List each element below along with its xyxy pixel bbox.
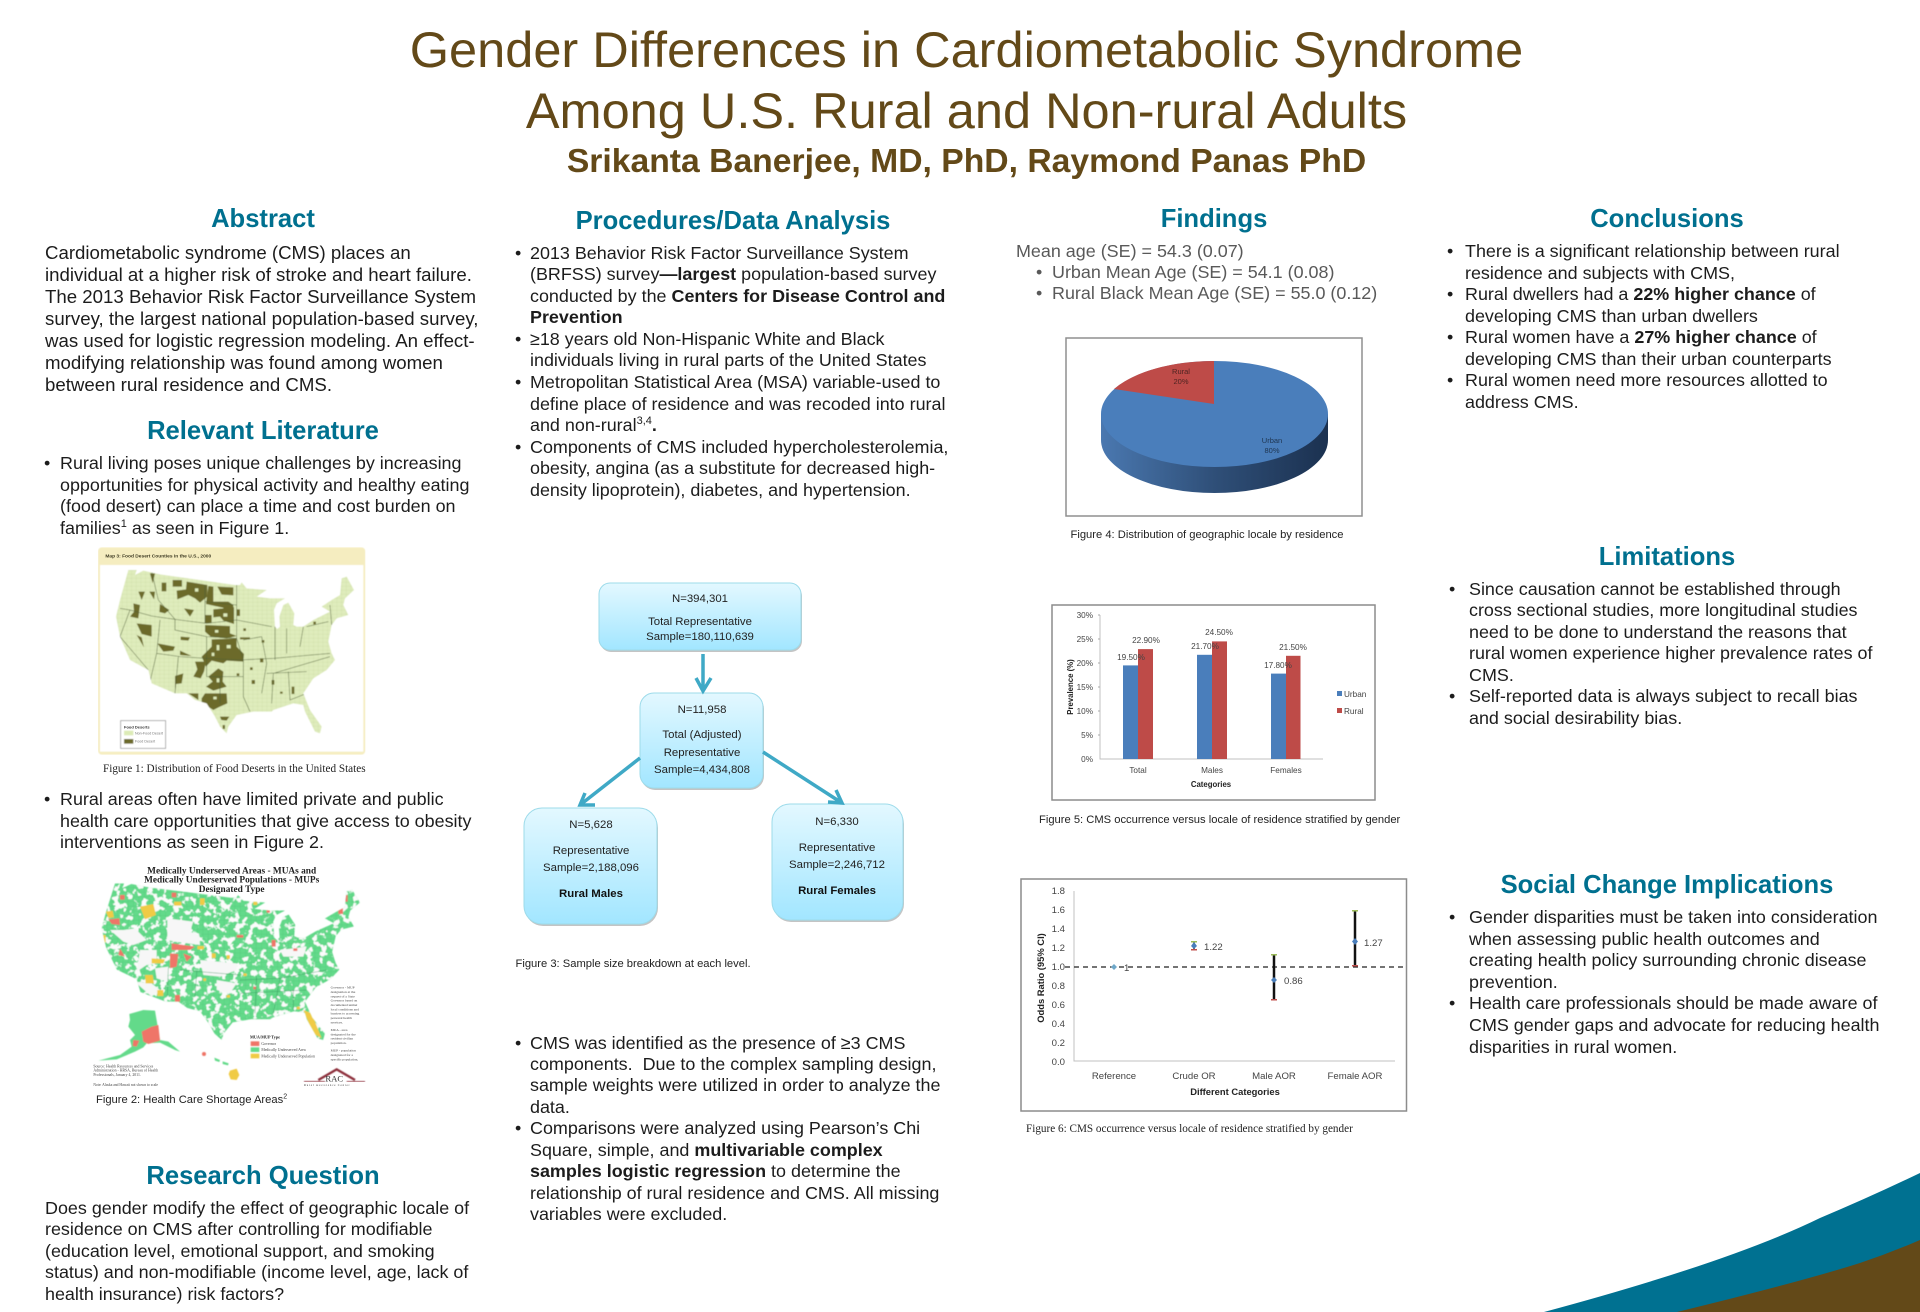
panel: limitations bbox=[1450, 543, 1872, 728]
figure 2: medically underserved map: population. bbox=[331, 1041, 347, 1045]
figure 2: medically underserved map: Administration - HRSA, Bureau of Health bbox=[93, 1069, 158, 1074]
text: limitations bullets: Self-reported data is always subject to recall bias bbox=[1469, 686, 1858, 706]
text: literature bullet 1: Rural living poses unique challenges by increasing bbox=[60, 453, 462, 473]
bars: females: 17.80% bbox=[1264, 661, 1292, 670]
box: rural females: N=6,330 bbox=[815, 816, 859, 828]
text: research question body: status) and non-modifiable (income level, age, lack of bbox=[45, 1262, 468, 1282]
text: research question body bbox=[45, 1198, 470, 1304]
text: procedures bullets continued: Comparisons were analyzed using Pearson’s Chi bbox=[530, 1118, 920, 1138]
panel: research question bbox=[45, 1162, 470, 1304]
figure 1: food desert map bbox=[98, 547, 366, 755]
arrow: adjusted to females bbox=[763, 752, 842, 803]
figure 2: medically underserved map: Governor bbox=[261, 1042, 277, 1046]
heading: limitations: Limitations bbox=[1599, 543, 1735, 571]
text: abstract body: was used for logistic regression modeling. An effect- bbox=[45, 330, 475, 351]
text: procedures bullets: density lipoprotein), diabetes, and hypertension. bbox=[530, 480, 911, 500]
text: conclusions bullets: Rural women have a 27% higher chance of bbox=[1465, 327, 1817, 347]
text: procedures bullets: and non-rural3,4. bbox=[530, 415, 657, 435]
text: procedures bullets: individuals living in rural parts of the United States bbox=[530, 350, 926, 370]
figure 2: medically underserved map: MUA/MUP Type bbox=[250, 1035, 280, 1040]
heading: findings: Findings bbox=[1161, 205, 1267, 233]
text: social change bullets: when assessing public health outcomes and bbox=[1469, 929, 1820, 949]
text: conclusions bullets: address CMS. bbox=[1465, 392, 1579, 412]
point: male AOR bbox=[1271, 954, 1303, 1000]
heading: social change implications: Social Change Implications bbox=[1501, 871, 1833, 899]
figure 2: medically underserved map: request of a State bbox=[331, 994, 355, 998]
figure 6: odds ratio chart bbox=[1020, 878, 1408, 1112]
figure 5: prevalence bar chart: 20% bbox=[1077, 659, 1093, 668]
text: procedures bullets continued bbox=[516, 1032, 940, 1224]
figure 6: odds ratio chart: Odds Ratio (95% CI) bbox=[1035, 933, 1046, 1023]
text: limitations bullets: Since causation cannot be established through bbox=[1469, 579, 1841, 599]
bars: males: 21.70% bbox=[1191, 642, 1219, 651]
text: procedures bullets: obesity, angina (as a substitute for decreased high- bbox=[530, 458, 935, 478]
text: procedures bullets continued: sample weights were utilized in order to analyze the bbox=[530, 1075, 940, 1095]
figure 2: medically underserved map: specific population. bbox=[331, 1057, 358, 1061]
figure 5: prevalence bar chart: 15% bbox=[1077, 683, 1093, 692]
bars: total bbox=[1117, 636, 1160, 759]
bars: females: 21.50% bbox=[1279, 643, 1307, 652]
text: limitations bullets: rural women experience higher prevalence rates of bbox=[1469, 643, 1872, 663]
figure 6: odds ratio chart: 1.6 bbox=[1052, 905, 1065, 916]
figure 1: food desert map: Non-Food Desert bbox=[135, 732, 163, 736]
figure 2: medically underserved map: Note: Alaska and Hawaii not shown to scale bbox=[93, 1083, 158, 1087]
figure 6: odds ratio chart: 1.8 bbox=[1052, 886, 1065, 897]
text: procedures bullets: ≥18 years old Non-Hispanic White and Black bbox=[530, 329, 884, 349]
box: rural males bbox=[524, 808, 658, 926]
panel: abstract bbox=[45, 205, 478, 395]
bars: total: 22.90% bbox=[1132, 636, 1160, 645]
text: abstract body: The 2013 Behavior Risk Factor Surveillance System bbox=[45, 286, 476, 307]
text: literature bullet 1: families1 as seen in Figure 1. bbox=[60, 518, 289, 538]
figure 6: odds ratio chart: 0.2 bbox=[1052, 1038, 1065, 1049]
text: conclusions bullets: residence and subjects with CMS, bbox=[1465, 262, 1735, 282]
figure 4: pie chart of locale: 20% bbox=[1173, 377, 1189, 386]
text: procedures bullets: define place of residence and was recoded into rural bbox=[530, 394, 945, 414]
figure 6: odds ratio chart: Different Categories bbox=[1190, 1086, 1280, 1097]
legend: Urban bbox=[1344, 690, 1367, 699]
figure 2: medically underserved map: barriers to accessing bbox=[331, 1012, 359, 1016]
figure 5: prevalence bar chart: 5% bbox=[1081, 731, 1093, 740]
box: rural males: Representative bbox=[553, 845, 629, 857]
text: abstract body: individual at a higher risk of stroke and heart failure. bbox=[45, 264, 472, 285]
figure 6: odds ratio chart: 1.2 bbox=[1052, 943, 1065, 954]
text: procedures bullets: (BRFSS) survey—largest population-based survey bbox=[530, 264, 936, 284]
box: rural females: Representative bbox=[799, 842, 875, 854]
text: abstract body bbox=[45, 242, 478, 395]
figure 2: medically underserved map: documented unmet bbox=[331, 1003, 357, 1007]
text: research question body: health insurance) risk factors? bbox=[45, 1284, 284, 1304]
text: procedures bullets bbox=[516, 242, 948, 500]
box: adjusted total: Total (Adjusted) bbox=[662, 729, 742, 741]
point: reference bbox=[1111, 963, 1129, 974]
text: limitations bullets: cross sectional studies, more longitudinal studies bbox=[1469, 600, 1858, 620]
figure 1: food desert map: Food Deserts bbox=[124, 724, 150, 729]
figure 5: prevalence bar chart: Prevalence (%) bbox=[1066, 659, 1075, 715]
figure 5: prevalence bar chart: 0% bbox=[1081, 755, 1093, 764]
figure 5: prevalence bar chart: 10% bbox=[1077, 707, 1093, 716]
figure 1: food desert map: Map 3: Food Desert Counties in the U.S., 2000 bbox=[105, 554, 211, 560]
figure 2: medically underserved map: Governor based on bbox=[331, 999, 358, 1003]
text: abstract body: modifying relationship was found among women bbox=[45, 352, 443, 373]
title bbox=[410, 21, 1523, 180]
figure 4: pie chart of locale: Rural bbox=[1172, 367, 1190, 376]
box: total sample: Sample=180,110,639 bbox=[646, 631, 754, 643]
figure 2: medically underserved map: MUP - population bbox=[331, 1049, 356, 1053]
text: abstract body: between rural residence and CMS. bbox=[45, 374, 332, 395]
figure 6: odds ratio chart: 1.0 bbox=[1052, 962, 1065, 973]
text: literature bullet 2: interventions as seen in Figure 2. bbox=[60, 832, 324, 852]
figure 2: medically underserved map: Rural Assistance Center bbox=[304, 1083, 350, 1087]
figure 5: prevalence bar chart: 30% bbox=[1077, 611, 1093, 620]
box: rural females: Rural Females bbox=[798, 885, 876, 897]
box: adjusted total: Sample=4,434,808 bbox=[654, 764, 750, 776]
text: procedures bullets continued: CMS was identified as the presence of ≥3 CMS bbox=[530, 1032, 905, 1052]
panel: social change implications bbox=[1450, 871, 1879, 1057]
text: conclusions bullets: developing CMS than their urban counterparts bbox=[1465, 348, 1832, 368]
figure 4: pie chart of locale: Urban bbox=[1262, 436, 1282, 445]
figure 2: medically underserved map: designated for a bbox=[331, 1053, 353, 1057]
text: procedures bullets: Prevention bbox=[530, 307, 623, 327]
box: total sample bbox=[599, 583, 802, 652]
text: procedures bullets continued: Square, simple, and multivariable complex bbox=[530, 1140, 883, 1160]
figure 6: odds ratio chart: 0.6 bbox=[1052, 1000, 1065, 1011]
figure 2: medically underserved map: designation at the bbox=[331, 990, 356, 994]
figure 5: prevalence bar chart: Females bbox=[1270, 766, 1302, 775]
box: rural males: Sample=2,188,096 bbox=[543, 862, 639, 874]
box: rural females: Sample=2,246,712 bbox=[789, 859, 885, 871]
text: research question body: Does gender modify the effect of geographic locale of bbox=[45, 1198, 469, 1218]
point: crude OR bbox=[1191, 941, 1223, 953]
figure 6: odds ratio chart: Reference bbox=[1092, 1071, 1136, 1082]
figure 1: food desert map: Food Desert bbox=[135, 740, 155, 744]
text: research question body: residence on CMS after controlling for modifiable bbox=[45, 1219, 432, 1239]
figure 2: medically underserved map: designated for the bbox=[331, 1032, 356, 1036]
point: male AOR: 0.86 bbox=[1284, 976, 1303, 987]
text: procedures bullets continued: data. bbox=[530, 1097, 570, 1117]
caption: figure 2: Figure 2: Health Care Shortage Areas2 bbox=[96, 1093, 287, 1106]
box: adjusted total bbox=[640, 693, 764, 790]
heading: relevant literature: Relevant Literature bbox=[147, 417, 379, 445]
figure 4: pie chart of locale bbox=[1065, 337, 1363, 517]
text: procedures bullets continued: samples logistic regression to determine the bbox=[530, 1161, 901, 1181]
heading: research question: Research Question bbox=[146, 1162, 380, 1190]
bars: males bbox=[1191, 628, 1233, 759]
figure 2: medically underserved map bbox=[93, 866, 366, 1087]
text: urban mean age: Urban Mean Age (SE) = 54.1 (0.08) bbox=[1052, 262, 1334, 282]
legend bbox=[1337, 690, 1367, 716]
caption: figure 6: Figure 6: CMS occurrence versus locale of residence stratified by gender bbox=[1026, 1123, 1353, 1135]
caption: figure 1: Figure 1: Distribution of Food Deserts in the United States bbox=[103, 763, 366, 775]
text: social change bullets: creating health policy surrounding chronic disease bbox=[1469, 950, 1867, 970]
bars: males: 24.50% bbox=[1205, 628, 1233, 637]
figure 2: medically underserved map: MUA - area bbox=[331, 1028, 348, 1032]
box: rural females bbox=[772, 804, 904, 922]
text: social change bullets: Health care professionals should be made aware of bbox=[1469, 993, 1877, 1013]
title: Srikanta Banerjee, MD, PhD, Raymond Panas PhD bbox=[567, 142, 1366, 180]
figure 5: prevalence bar chart bbox=[1051, 604, 1376, 801]
figure 2: medically underserved map: Medically Underserved Populations - MUPs bbox=[144, 876, 320, 886]
text: abstract body: Cardiometabolic syndrome (CMS) places an bbox=[45, 242, 411, 262]
figure 6: odds ratio chart: 0.0 bbox=[1052, 1057, 1065, 1068]
text: limitations bullets: and social desirability bias. bbox=[1469, 708, 1682, 728]
figure 6: odds ratio chart: 0.8 bbox=[1052, 981, 1065, 992]
text: conclusions bullets: developing CMS than urban dwellers bbox=[1465, 306, 1758, 326]
box: adjusted total: N=11,958 bbox=[678, 704, 726, 716]
text: rural black mean age: Rural Black Mean Age (SE) = 55.0 (0.12) bbox=[1052, 283, 1377, 303]
figure 2: medically underserved map: Source: Health Resources and Services bbox=[93, 1064, 154, 1068]
point: crude OR: 1.22 bbox=[1204, 942, 1223, 953]
box: total sample: Total Representative bbox=[648, 616, 752, 628]
text: social change bullets bbox=[1450, 907, 1879, 1057]
text: procedures bullets: Metropolitan Statistical Area (MSA) variable-used to bbox=[530, 372, 940, 392]
figure 6: odds ratio chart: Crude OR bbox=[1172, 1071, 1216, 1082]
text: mean age: Mean age (SE) = 54.3 (0.07) bbox=[1016, 240, 1244, 260]
panel: conclusions bbox=[1448, 205, 1840, 412]
panel: findings bbox=[1016, 205, 1377, 303]
text: social change bullets: disparities in rural women. bbox=[1469, 1037, 1677, 1057]
figure 2: medically underserved map: Medically Underserved Areas - MUAs and bbox=[147, 866, 317, 876]
figure 6: odds ratio chart: 1.4 bbox=[1052, 924, 1066, 935]
text: limitations bullets bbox=[1450, 579, 1872, 728]
text: social change bullets: Gender disparities must be taken into consideration bbox=[1469, 907, 1877, 927]
text: procedures bullets continued: components. Due to the complex sampling design, bbox=[530, 1054, 936, 1074]
box: rural males: N=5,628 bbox=[569, 819, 613, 831]
text: conclusions bullets: There is a significant relationship between rural bbox=[1465, 241, 1840, 261]
caption: figure 4: Figure 4: Distribution of geographic locale by residence bbox=[1070, 529, 1344, 541]
text: social change bullets: CMS gender gaps and advocate for reducing health bbox=[1469, 1015, 1879, 1035]
figure 2: medically underserved map: resident civilian bbox=[331, 1037, 353, 1041]
panel: relevant literature bbox=[44, 417, 472, 852]
figure 2: medically underserved map: Governor - MUP bbox=[331, 986, 355, 990]
box: adjusted total: Representative bbox=[664, 747, 740, 759]
arrow: total to adjusted bbox=[696, 654, 711, 691]
arrow: adjusted to males bbox=[580, 758, 640, 805]
caption: figure 3: Figure 3: Sample size breakdown at each level. bbox=[516, 958, 751, 970]
text: procedures bullets continued: variables were excluded. bbox=[530, 1204, 727, 1224]
figure 5: prevalence bar chart: Males bbox=[1201, 766, 1223, 775]
figure 2: medically underserved map: Professionals, January 4, 2011. bbox=[93, 1073, 141, 1078]
figure 2: medically underserved map: Medically Underserved Population bbox=[261, 1054, 315, 1058]
point: female AOR bbox=[1352, 910, 1383, 966]
text: abstract body: survey, the largest national population-based survey, bbox=[45, 308, 478, 329]
figure 2: medically underserved map: Designated Type bbox=[199, 885, 265, 895]
text: research question body: (education level, emotional support, and smoking bbox=[45, 1241, 435, 1261]
point: female AOR: 1.27 bbox=[1364, 938, 1383, 949]
bars: females bbox=[1264, 643, 1307, 759]
box: total sample: N=394,301 bbox=[672, 593, 728, 605]
box: rural males: Rural Males bbox=[559, 888, 623, 900]
figure 2: medically underserved map: Medically Underserved Area bbox=[261, 1048, 306, 1052]
title: Among U.S. Rural and Non-rural Adults bbox=[526, 82, 1407, 139]
text: literature bullet 2: health care opportunities that give access to obesity bbox=[60, 811, 471, 831]
text: literature bullet 1: opportunities for physical activity and healthy eating bbox=[60, 475, 469, 495]
point: reference: 1 bbox=[1124, 963, 1129, 974]
figure 3: sample size flowchart bbox=[524, 582, 904, 926]
text: conclusions bullets bbox=[1448, 241, 1840, 412]
text: procedures bullets: 2013 Behavior Risk Factor Surveillance System bbox=[530, 242, 909, 262]
text: conclusions bullets: Rural women need more resources allotted to bbox=[1465, 370, 1828, 390]
text: procedures bullets: conducted by the Centers for Disease Control and bbox=[530, 286, 945, 306]
figure 5: prevalence bar chart: 25% bbox=[1077, 635, 1093, 644]
figure 4: pie chart of locale: 80% bbox=[1264, 446, 1280, 455]
figure 6: odds ratio chart: Male AOR bbox=[1252, 1071, 1296, 1082]
panel: procedures and data analysis bbox=[516, 207, 948, 500]
text: literature bullet 1: (food desert) can place a time and cost burden on bbox=[60, 496, 456, 516]
heading: conclusions: Conclusions bbox=[1590, 205, 1744, 233]
legend: Rural bbox=[1344, 707, 1364, 716]
figure 6: odds ratio chart: 0.4 bbox=[1052, 1019, 1066, 1030]
text: literature bullet 1 bbox=[60, 453, 506, 539]
text: procedures bullets continued: relationship of rural residence and CMS. All missing bbox=[530, 1183, 939, 1203]
heading: procedures: Procedures/Data Analysis bbox=[576, 207, 890, 235]
heading: abstract: Abstract bbox=[211, 205, 315, 233]
figure 2: medically underserved map: RAC bbox=[325, 1074, 343, 1084]
figure 6: odds ratio chart: Female AOR bbox=[1328, 1071, 1383, 1082]
figure 5: prevalence bar chart: Total bbox=[1129, 766, 1147, 775]
figure 2: medically underserved map: local conditions and bbox=[331, 1007, 359, 1011]
text: limitations bullets: need to be done to understand the reasons that bbox=[1469, 622, 1847, 642]
bars: total: 19.50% bbox=[1117, 653, 1145, 662]
figure 5: prevalence bar chart: Categories bbox=[1191, 780, 1232, 789]
figure 2: medically underserved map: services. bbox=[331, 1020, 343, 1024]
corner decoration: teal and brown swoosh bbox=[1544, 1173, 1920, 1312]
text: procedures bullets: Components of CMS included hypercholesterolemia, bbox=[530, 437, 948, 457]
caption: figure 5: Figure 5: CMS occurrence versus locale of residence stratified by gender bbox=[1039, 814, 1400, 826]
text: literature bullet 2: Rural areas often have limited private and public bbox=[60, 789, 444, 809]
text: literature bullet 2 bbox=[60, 789, 471, 854]
text: limitations bullets: CMS. bbox=[1469, 665, 1514, 685]
text: conclusions bullets: Rural dwellers had a 22% higher chance of bbox=[1465, 284, 1816, 304]
text: social change bullets: prevention. bbox=[1469, 972, 1558, 992]
title: Gender Differences in Cardiometabolic Syndrome bbox=[410, 21, 1523, 78]
figure 2: medically underserved map: personal health bbox=[331, 1016, 352, 1020]
